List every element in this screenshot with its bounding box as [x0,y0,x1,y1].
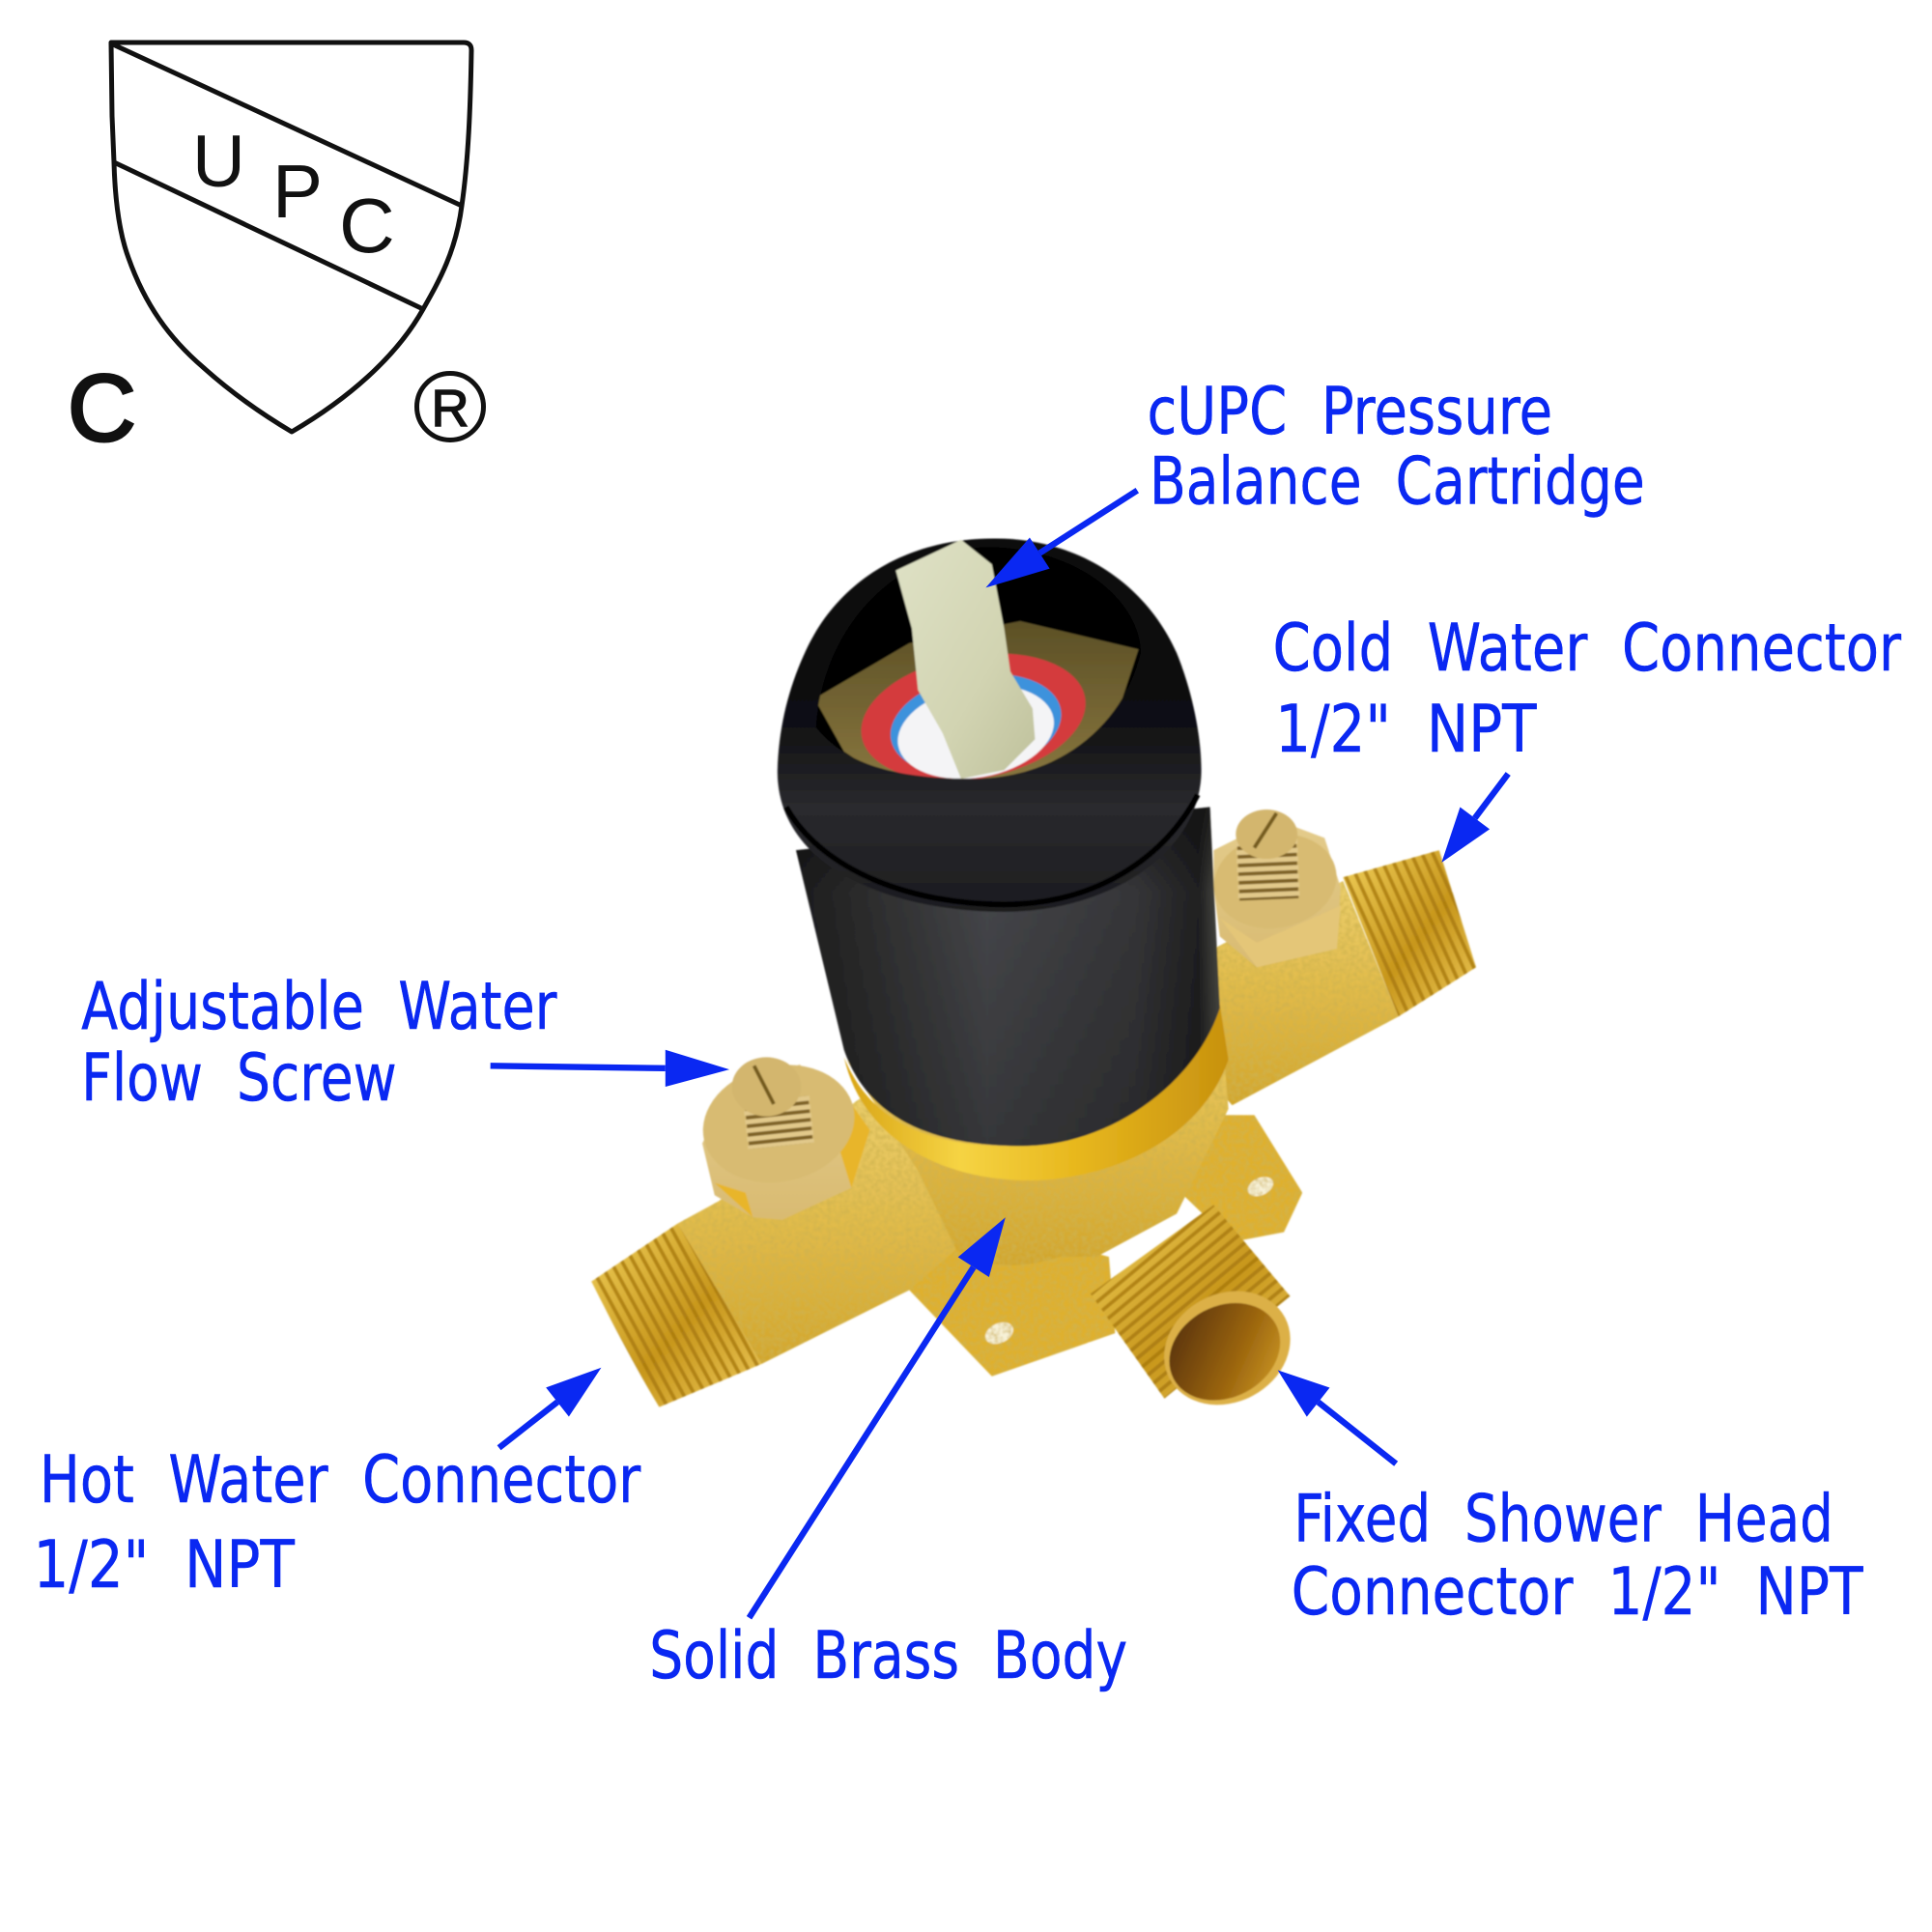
arrow: flow screw [491,1050,729,1087]
label: cartridge: cUPC Pressure [1147,373,1552,449]
left pipe [678,1096,956,1364]
label: hot water: 1/2" NPT [33,1526,295,1603]
right adjustment screw [1236,810,1297,899]
front connector opening [1144,1269,1310,1427]
right hex nut [1207,819,1344,967]
shield band lower line [114,162,423,309]
registered mark [417,373,483,440]
letter small c: C [68,355,136,461]
right pipe [1213,881,1399,1105]
front mounting plate [909,1220,1115,1377]
arrow: hot water [499,1368,601,1448]
brass hub [824,1005,1229,1265]
cap opening [815,547,1141,781]
valve photograph illustration [591,529,1476,1427]
red seal ring [860,653,1087,781]
brass ring [844,1005,1229,1180]
arrow: fixed shower head [1278,1370,1396,1463]
black dome cap [778,538,1202,912]
labels and arrows [33,373,1901,1693]
black cylinder body [796,807,1220,1146]
label: cartridge: Balance Cartridge [1150,443,1645,520]
label: hot water [33,1441,640,1603]
right thread [1343,850,1476,1016]
rear mounting plate [1171,1115,1302,1242]
arrow: brass body [750,1217,1006,1618]
brass retaining nut [814,621,1139,788]
label: adjustable flow screw [81,968,557,1116]
label: adjustable flow screw: Adjustable Water [81,968,557,1044]
left hex nut [692,1051,870,1220]
left adjustment screw [732,1057,801,1146]
cartridge stem [895,540,1035,779]
arrow: cold water [1441,774,1508,863]
letter U: U [192,121,245,203]
opening dark interior [815,547,1141,753]
left thread [591,1224,761,1407]
cUPC certification logo [68,43,483,461]
front thread [1091,1205,1290,1399]
registered mark: R [431,380,469,438]
letter C: C [339,183,395,269]
label: cold water: 1/2" NPT [1275,691,1537,767]
blue inner ring [889,674,1063,763]
label: fixed shower head [1292,1481,1863,1630]
label: cartridge [1147,373,1645,520]
label: cold water [1273,610,1901,767]
letter P: P [272,149,323,234]
label: solid brass body: Solid Brass Body [649,1617,1127,1693]
arrow: cartridge [985,491,1137,587]
shield band upper line [113,44,462,206]
label: adjustable flow screw: Flow Screw [81,1039,397,1116]
label: hot water: Hot Water Connector [40,1441,640,1518]
white cartridge core [896,688,1055,781]
shield outline [111,43,471,432]
